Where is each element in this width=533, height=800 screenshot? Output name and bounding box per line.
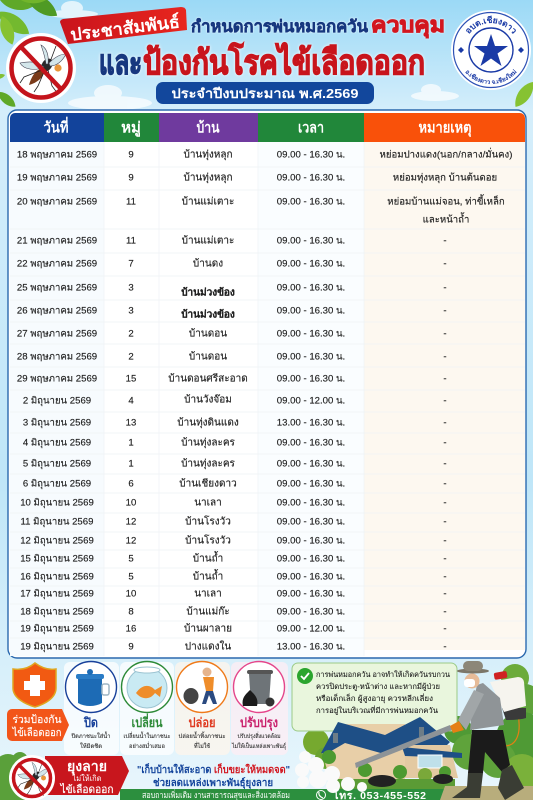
item: ปิด: ปิด <box>83 715 98 730</box>
green footer bar <box>120 789 533 800</box>
row 29 May: 29 พฤษภาคม 2569 <box>17 374 97 384</box>
row 18 June: 8 <box>128 606 134 618</box>
slogan <box>137 762 290 789</box>
row 29 May: บ้านดอนศรีสะอาด <box>168 372 248 384</box>
logo: อบต.เชียงดาว <box>451 10 531 90</box>
row 16 June: 09.00 - 16.30 น. <box>277 572 345 582</box>
row 22 May: - <box>443 258 447 270</box>
row 22 May: 22 พฤษภาคม 2569 <box>17 258 97 270</box>
trees <box>303 664 533 790</box>
row 5 June <box>23 458 447 470</box>
row 16 June: - <box>443 572 447 582</box>
item: ปล่อย <box>176 662 228 750</box>
row 10 June: นาเลา <box>194 498 222 508</box>
table header: บ้าน <box>196 120 220 136</box>
row 20 May <box>17 194 505 226</box>
illustration: sprayer man <box>355 661 526 800</box>
row 11 June: 11 มิถุนายน 2569 <box>21 516 93 528</box>
item: ปิด: ให้มิดชิด <box>80 742 102 750</box>
row 26 May <box>17 306 447 320</box>
row 27 May: 2 <box>128 328 134 340</box>
row 12 June: 12 มิถุนายน 2569 <box>20 536 94 546</box>
row 12 June: 12 <box>126 536 136 546</box>
row 6 June: บ้านเชียงดาว <box>179 478 237 490</box>
row 16 June: บ้านถ้ำ <box>193 568 223 582</box>
row 19 May: หย่อมทุ่งหลุก บ้านต้นดอย <box>393 172 497 184</box>
row 2 June: - <box>443 396 447 406</box>
tag: ร่วมป้องกันไข้เลือดออก: ไข้เลือดออก <box>12 726 62 739</box>
row 26 May: 09.00 - 16.30 น. <box>277 306 345 316</box>
icon: shield <box>13 663 56 707</box>
row 19 May: 9 <box>128 172 134 184</box>
row 2 June: 2 มิถุนายน 2569 <box>23 396 91 406</box>
row 12 June: - <box>443 536 447 546</box>
row 26 May: 26 พฤษภาคม 2569 <box>17 306 97 316</box>
illustration: house <box>321 717 462 780</box>
row 6 June: 09.00 - 16.30 น. <box>277 478 345 490</box>
budget year pill <box>156 82 374 104</box>
row 19 June second: 13.00 - 16.30 น. <box>277 642 345 652</box>
contact line: สอบถามเพิ่มเติม งานสาธารณสุขและสิ่งแวดล้อม <box>142 789 290 800</box>
row 15 June: บ้านถ้ำ <box>193 550 223 564</box>
item: ปิด: ปิดภาชนะใส่น้ำ <box>71 730 110 740</box>
row 29 May: 09.00 - 16.30 น. <box>277 374 345 384</box>
row 6 June: 6 <box>128 478 134 490</box>
row 5 June: บ้านทุ่งละคร <box>181 458 236 470</box>
item: ปรับปรุง <box>231 662 286 750</box>
bushes near the house <box>322 750 455 789</box>
row 4 June: 1 <box>128 438 134 448</box>
row 19 June second: 9 <box>128 642 134 652</box>
note: warning <box>292 663 457 731</box>
row 26 May: - <box>443 306 447 316</box>
row 25 May: บ้านม่วงข้อง <box>181 286 235 298</box>
row 25 May: 09.00 - 16.30 น. <box>277 282 345 294</box>
row 18 June: บ้านแม่ก๊ะ <box>186 606 230 618</box>
row 3 June <box>23 416 447 428</box>
row 6 June: - <box>443 478 447 490</box>
row 15 June: 15 มิถุนายน 2569 <box>20 554 94 564</box>
row 27 May: 27 พฤษภาคม 2569 <box>17 328 97 340</box>
row 28 May: 09.00 - 16.30 น. <box>277 352 345 362</box>
row 11 June: 12 <box>126 516 136 528</box>
row 4 June: 09.00 - 16.30 น. <box>277 438 345 448</box>
logo: อบต.เชียงดาว: อบต.เชียงดาว <box>466 16 516 34</box>
note: warning: การอยู่ในบริเวณที่มีการพ่นหมอกควัน <box>316 705 438 715</box>
row 21 May: บ้านแม่เตาะ <box>182 234 234 246</box>
row 18 May: 9 <box>128 150 134 160</box>
smoke <box>295 751 367 793</box>
row 2 June: บ้านวังจ๊อม <box>184 394 232 406</box>
item: เปลี่ยน: เปลี่ยน <box>132 713 163 730</box>
item: ปิด <box>66 662 116 750</box>
row 12 June: บ้านโรงวัว <box>185 534 231 546</box>
row 18 June: 09.00 - 16.30 น. <box>277 606 345 618</box>
row 18 May: 09.00 - 16.30 น. <box>277 150 345 160</box>
row 29 May: 15 <box>126 374 136 384</box>
row 18 May: หย่อมปางแดง(นอก/กลาง/มั่นคง) <box>380 148 512 160</box>
title line 2: ป้องกันโรคไข้เลือดออก <box>143 42 425 82</box>
budget year pill: ประจำปีงบประมาณ พ.ศ.2569 <box>172 86 358 101</box>
row 19 June second: ปางแดงใน <box>185 640 231 652</box>
item: ปรับปรุง: ปรับปรุงสิ่งแวดล้อม <box>238 732 281 740</box>
row 22 May: บ้านดง <box>193 258 223 270</box>
row 27 May: - <box>443 328 447 340</box>
road <box>440 786 533 800</box>
tag: ร่วมป้องกันไข้เลือดออก: ร่วมป้องกัน <box>12 714 62 726</box>
banner: ยุงลาย: ไม่ให้เกิด <box>72 774 102 783</box>
footer pale cards <box>64 662 288 755</box>
row 19 June first: บ้านผาลาย <box>184 622 232 634</box>
table header: เวลา <box>298 120 324 136</box>
row 19 June first: 19 มิถุนายน 2569 <box>20 624 94 634</box>
item: เปลี่ยน: อย่างสม่ำเสมอ <box>129 742 165 750</box>
row 21 May: - <box>443 236 447 246</box>
row 18 May <box>17 148 512 160</box>
row 25 May: 3 <box>128 282 134 294</box>
row 27 May <box>17 328 447 340</box>
item: ปรับปรุง: ปรับปรุง <box>240 715 278 731</box>
row 12 June <box>20 534 447 546</box>
clouds <box>46 1 459 110</box>
row 10 June: 09.00 - 16.30 น. <box>277 498 345 508</box>
row 19 June first: - <box>443 624 447 634</box>
row 17 June: 09.00 - 16.30 น. <box>277 588 345 600</box>
row 2 June: 09.00 - 12.00 น. <box>277 396 345 406</box>
row 20 May: 20 พฤษภาคม 2569 <box>17 196 97 208</box>
icon: no mosquito <box>6 33 76 103</box>
row 28 May <box>17 350 447 362</box>
row 16 June: 5 <box>128 572 134 582</box>
row 6 June <box>23 478 447 490</box>
row 19 May: บ้านทุ่งหลุก <box>183 172 233 184</box>
banner: ยุงลาย: ไข้เลือดออก <box>60 783 114 796</box>
row 20 May: 11 <box>126 196 136 208</box>
row 19 June second <box>20 640 447 652</box>
row 22 May <box>17 258 447 270</box>
item: ปล่อย: ปล่อย <box>188 715 216 730</box>
table header: วันที่ <box>44 116 69 136</box>
row 22 May: 09.00 - 16.30 น. <box>277 258 345 270</box>
row 28 May: 28 พฤษภาคม 2569 <box>17 352 97 362</box>
note: warning: ควรปิดประตู-หน้าต่าง และหากมีผู้ป่วย <box>316 682 440 691</box>
row 18 May: บ้านทุ่งหลุก <box>183 148 233 160</box>
row 25 May: - <box>443 282 447 294</box>
row 19 June first <box>20 622 447 634</box>
item: ปล่อย: ปล่อยน้ำทิ้งภาชนะ <box>178 730 226 740</box>
row 3 June: 3 มิถุนายน 2569 <box>23 418 91 428</box>
row 29 May: - <box>443 374 447 384</box>
row 19 May <box>17 172 497 184</box>
tyres <box>368 774 453 787</box>
row 16 June <box>20 568 447 582</box>
row 15 June: 5 <box>128 554 134 564</box>
row 28 May: บ้านดอน <box>189 350 227 362</box>
row 10 June <box>20 498 447 508</box>
badge: ประชาสัมพันธ์: ประชาสัมพันธ์ <box>69 11 181 45</box>
row 18 June: - <box>443 606 447 618</box>
row 18 June <box>20 606 447 618</box>
item: เปลี่ยน: เปลี่ยนน้ำในภาชนะ <box>124 730 170 740</box>
row 20 May: 09.00 - 16.30 น. <box>277 196 345 208</box>
item: เปลี่ยน <box>122 662 172 750</box>
row 19 June second: 19 มิถุนายน 2569 <box>20 642 94 652</box>
row 10 June: - <box>443 498 447 508</box>
row 20 May: และหน้าถ้ำ <box>423 212 469 226</box>
row 4 June: บ้านทุ่งละคร <box>181 436 236 448</box>
row 27 May: 09.00 - 16.30 น. <box>277 328 345 340</box>
row 11 June <box>21 514 447 528</box>
row 11 June: 09.00 - 16.30 น. <box>277 516 345 528</box>
item: ปรับปรุง: ไม่ให้เป็นแหล่งเพาะพันธุ์ <box>231 741 286 750</box>
row 19 June first: 16 <box>126 624 136 634</box>
row 3 June: - <box>443 418 447 428</box>
row 3 June: 13.00 - 16.30 น. <box>277 418 345 428</box>
row 26 May: บ้านม่วงข้อง <box>181 308 235 320</box>
row 2 June: 4 <box>128 396 134 406</box>
row 11 June: - <box>443 516 447 528</box>
banner: ยุงลาย <box>9 755 129 800</box>
table header <box>10 113 525 142</box>
row 4 June <box>23 436 447 448</box>
slogan: ช่วยลดแหล่งเพาะพันธุ์ยุงลาย <box>153 777 273 789</box>
row 28 May: 2 <box>128 352 134 362</box>
row 21 May: 11 <box>126 236 136 246</box>
row 5 June: 5 มิถุนายน 2569 <box>23 458 91 470</box>
note: warning: หรือเด็กเล็ก ผู้สูงอายุ ควรหลีกเลี่ยง <box>316 693 433 703</box>
row 26 May: 3 <box>128 306 134 316</box>
row 6 June: 6 มิถุนายน 2569 <box>23 478 91 490</box>
row 4 June: 4 มิถุนายน 2569 <box>23 438 91 448</box>
row 4 June: - <box>443 438 447 448</box>
note: warning: การพ่นหมอกควัน อาจทำให้เกิดควันรบกวน <box>316 670 450 679</box>
row 17 June <box>20 588 447 600</box>
row 18 May: 18 พฤษภาคม 2569 <box>17 150 97 160</box>
leaves: top left <box>0 0 61 110</box>
row 5 June: 1 <box>128 458 134 470</box>
row 25 May <box>17 282 447 298</box>
row 16 June: 16 มิถุนายน 2569 <box>20 572 94 582</box>
panel: schedule table <box>8 110 526 658</box>
row 15 June: - <box>443 554 447 564</box>
logo: อบต.เชียงดาว: อ.เชียงดาว จ.เชียงใหม่ <box>465 69 517 84</box>
table header: หมายเหตุ <box>418 120 472 138</box>
row 20 May: บ้านแม่เตาะ <box>182 196 234 208</box>
row 19 May: 19 พฤษภาคม 2569 <box>17 172 97 184</box>
row 17 June: นาเลา <box>194 588 222 600</box>
row 17 June: 17 มิถุนายน 2569 <box>20 588 94 600</box>
row 19 June first: 09.00 - 12.00 น. <box>277 624 345 634</box>
row 21 May <box>17 234 447 246</box>
leaves: right <box>511 79 533 110</box>
table header: หมู่ <box>121 120 141 138</box>
slogan: "เก็บบ้านให้สะอาด เก็บขยะให้หมดจด" <box>137 762 290 776</box>
title line 1: กำหนดการพ่นหมอกควัน <box>191 18 369 36</box>
row 20 May: หย่อมบ้านแม่จอน, ท่าขี้เหล็ก <box>387 194 505 208</box>
row 18 June: 18 มิถุนายน 2569 <box>20 606 94 618</box>
row 10 June: 10 <box>126 498 136 508</box>
contact line <box>142 789 426 800</box>
row 3 June: 13 <box>126 418 136 428</box>
banner: ยุงลาย: ยุงลาย <box>67 758 107 775</box>
row 15 June: 09.00 - 16.30 น. <box>277 554 345 564</box>
row 17 June: 10 <box>126 588 136 600</box>
row 21 May: 21 พฤษภาคม 2569 <box>17 236 97 246</box>
row 12 June: 09.00 - 16.30 น. <box>277 536 345 546</box>
title line 1 <box>191 14 445 39</box>
row 2 June <box>23 394 447 406</box>
row 22 May: 7 <box>128 258 134 270</box>
row 11 June: บ้านโรงวัว <box>185 514 231 528</box>
row 17 June: - <box>443 588 447 600</box>
tag: ร่วมป้องกันไข้เลือดออก <box>7 709 69 741</box>
row 25 May: 25 พฤษภาคม 2569 <box>17 282 97 294</box>
title line 1: ควบคุม <box>371 14 445 39</box>
title line 2: และ <box>99 44 142 82</box>
row 21 May: 09.00 - 16.30 น. <box>277 236 345 246</box>
row 3 June: บ้านทุ่งดินแดง <box>177 416 239 428</box>
row 27 May: บ้านดอน <box>189 328 227 340</box>
row 29 May <box>17 372 447 384</box>
row 5 June: - <box>443 458 447 470</box>
row 19 May: 09.00 - 16.30 น. <box>277 172 345 184</box>
left bushes <box>0 752 30 800</box>
row 28 May: - <box>443 352 447 362</box>
row 10 June: 10 มิถุนายน 2569 <box>20 498 94 508</box>
row 5 June: 09.00 - 16.30 น. <box>277 458 345 470</box>
item: ปล่อย: ที่ไม่ใช้ <box>194 742 210 750</box>
row 15 June <box>20 550 447 564</box>
row 19 June second: - <box>443 642 447 652</box>
